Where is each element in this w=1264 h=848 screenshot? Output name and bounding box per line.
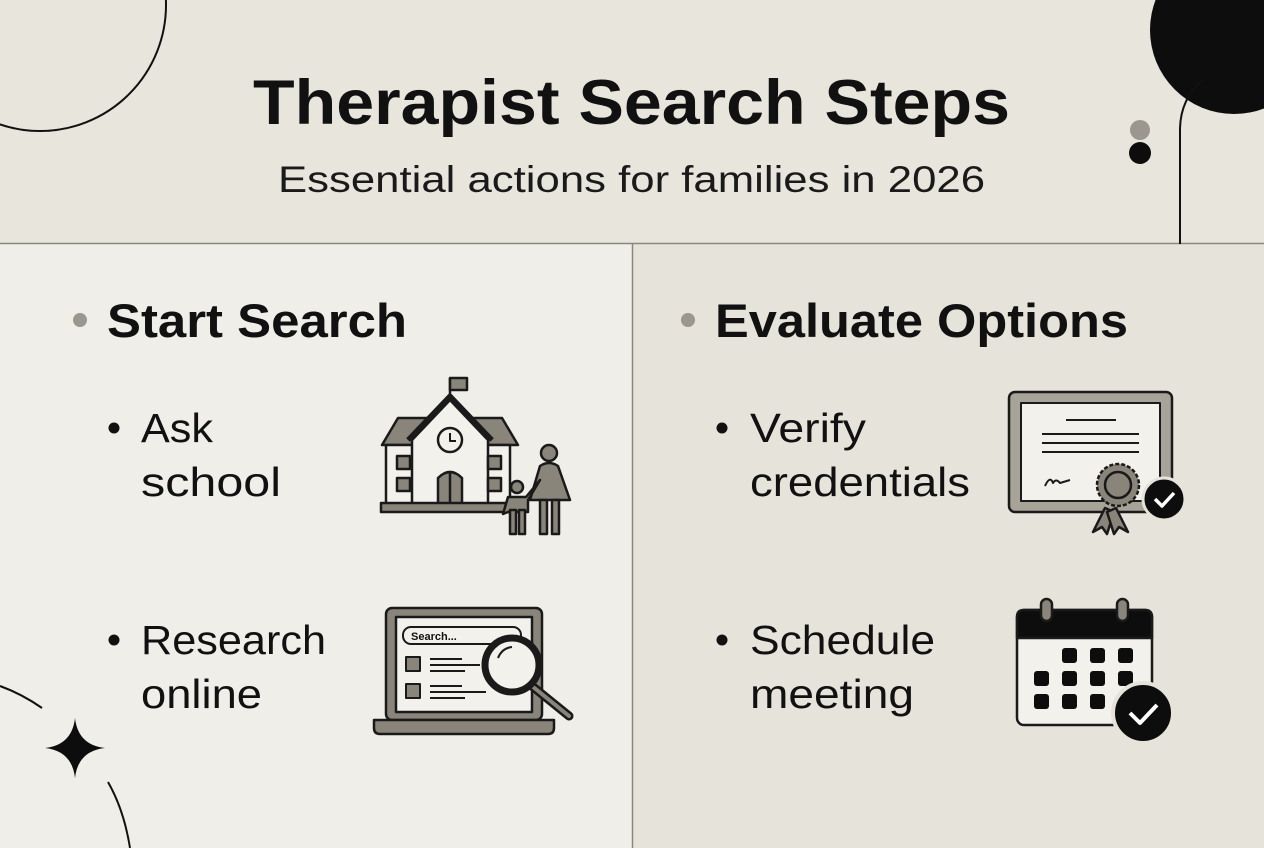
- bullet: ask school: Ask: [141, 405, 214, 451]
- bullet: verify credentials: credentials: [750, 459, 970, 505]
- icon: certificate with badge: [1009, 392, 1185, 534]
- icon: school with parent and child: [381, 378, 570, 534]
- bullet: verify credentials: [716, 405, 970, 505]
- bullet: ask school: [108, 405, 281, 505]
- heading: evaluate options: Evaluate Options: [715, 294, 1128, 347]
- icon: calendar with check: [1017, 599, 1173, 743]
- icon: laptop with magnifier: Search...: [411, 631, 457, 643]
- panel: evaluate options: [681, 294, 1185, 743]
- panel: start search: [73, 294, 570, 734]
- bullet: research online: Research: [141, 617, 326, 663]
- bullet: research online: [108, 617, 326, 717]
- bullet: research online: online: [141, 671, 262, 717]
- bullet: schedule meeting: [716, 617, 935, 717]
- decoration: bottom-left arcs and star: [0, 686, 130, 848]
- decoration: top-right circle and line: [1129, 0, 1264, 244]
- bullet: schedule meeting: Schedule: [750, 617, 935, 663]
- bullet: verify credentials: Verify: [750, 405, 867, 451]
- decoration: top-left arc: [0, 0, 166, 131]
- bullet: schedule meeting: meeting: [750, 671, 914, 717]
- heading: start search: Start Search: [107, 294, 407, 347]
- bullet: ask school: school: [141, 459, 281, 505]
- title: Therapist Search Steps: [253, 68, 1010, 138]
- subtitle: Essential actions for families in 2026: [278, 159, 985, 200]
- icon: laptop with magnifier: [374, 608, 569, 734]
